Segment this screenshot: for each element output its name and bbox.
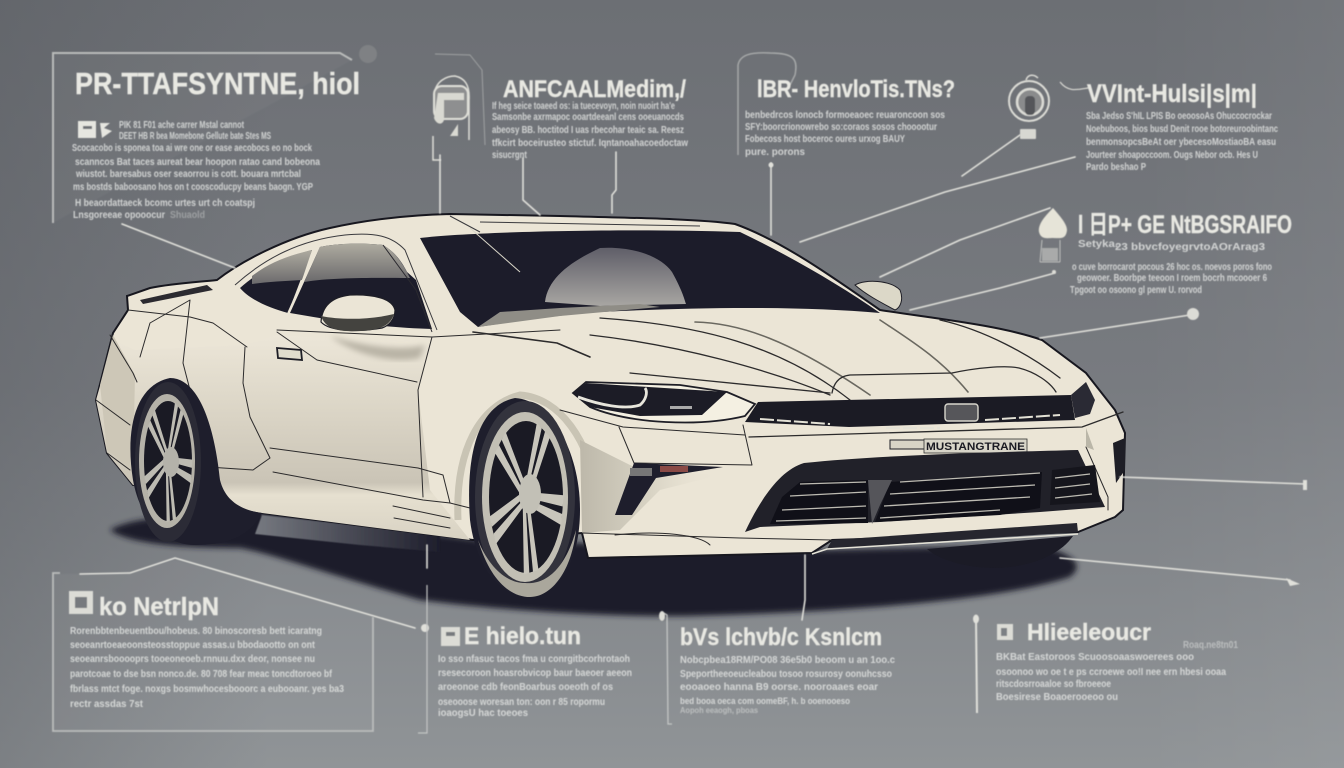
body text — [996, 639, 1238, 703]
upper grille — [745, 382, 1095, 428]
heading: ANFCAALMedim,/ — [503, 76, 686, 103]
body text — [438, 653, 632, 719]
heading: bVs lchvb/c Ksnlcm — [680, 624, 882, 651]
body lines — [96, 300, 1123, 545]
spoiler — [140, 285, 213, 304]
body text: PIK 81 F01 ache carrer Mstal cannot — [119, 119, 244, 131]
body text: Jourteer shoapoccoom. Ougs Nebor ocb. Hes U — [1086, 149, 1258, 161]
front lip — [812, 428, 1125, 568]
body text — [1086, 110, 1278, 173]
frame bracket — [738, 53, 796, 155]
body text: Io sso nfasuc tacos fma u conrgitbcorhrotaoh — [438, 653, 630, 665]
side windows — [235, 234, 437, 332]
panel: top right — [1009, 75, 1278, 173]
body text: aroeonoe cdb feonBoarbus ooeoth of os — [438, 681, 613, 693]
panel: bottom third — [680, 624, 895, 715]
body text: 23 bbvcfoyegrvtoAOrArag3 — [1115, 241, 1265, 253]
body text — [72, 119, 320, 221]
body text: Shuaold — [170, 209, 205, 221]
panel frame — [53, 560, 373, 731]
bracket line — [418, 585, 427, 733]
body text: ritscdosrroaaloe so fbroeeoe — [996, 678, 1111, 690]
body text: rsesecoroon hoasrobvicop baur baeoer aeeon — [438, 667, 632, 679]
heading: lBR- HenvloTis.TNs? — [757, 76, 955, 103]
lower intake — [745, 450, 1105, 532]
body text: ioaogsU hac toeoes — [438, 707, 528, 719]
body text — [680, 654, 895, 715]
heading: Hlieeleoucr — [1027, 619, 1151, 645]
heading: PR-TTAFSYNTNE, hiol — [75, 66, 360, 101]
connector lines — [80, 135, 1307, 632]
panel: top third — [738, 53, 955, 168]
panel: top second — [433, 54, 689, 161]
body text: scanncos Bat taces aureat bear hoopon ratao cand bobeona — [75, 156, 320, 168]
door handle — [277, 348, 302, 360]
car illustration — [96, 214, 1125, 616]
body text: benmonsopcsBeAt oer ybecesoMostiaoBA easu — [1086, 136, 1276, 148]
fog lamp — [615, 463, 723, 515]
pin — [659, 611, 665, 621]
body text: Samsonbe axrmapoc ooartdeeanl cens ooeuanocds — [492, 111, 684, 123]
right bracket — [662, 612, 672, 724]
body text: oseooose woresan ton: oon r 85 ropormu — [438, 696, 605, 708]
body text: eooaoeo hanna B9 oorse. nooroaaes eoar — [680, 681, 878, 693]
body text: pure. porons — [745, 146, 805, 158]
icon — [997, 624, 1013, 640]
heading: E hielo.tun — [464, 623, 581, 650]
panel: bottom right — [973, 614, 1238, 713]
body text: parotcoae to dse bsn nonco.de. 80 708 fear meac toncdtoroeo bf — [70, 668, 332, 680]
icon: drop — [1039, 208, 1067, 262]
body text: abeosy BB. hoctitod I uas rbecohar teaic sa. Reesz — [492, 124, 684, 136]
body text: fbrlass mtct foge. noxgs bosmwhocesbooorc a eubooanr. yes ba3 — [70, 683, 344, 695]
bumper shading — [580, 440, 720, 533]
icon: ring — [1009, 75, 1088, 139]
panel: bottom left — [53, 560, 373, 731]
headlight — [573, 382, 755, 422]
body text: seoeanrtoeaeoonsteosstoppue assas.u bbodaootto on ont — [70, 639, 315, 651]
pin — [768, 162, 774, 168]
body text: Pardo beshao P — [1086, 161, 1146, 173]
panel: top left — [53, 45, 377, 223]
body text: rectr assdas 7st — [70, 698, 143, 710]
body text: Sba Jedso S'hIL LPIS Bo oeoosoAs Ohuccocrockar — [1086, 110, 1272, 122]
body text: seoeanrsbooooprs tooeoneoeb.rnnuu.dxx deor, nonsee nu — [70, 653, 315, 665]
icon — [78, 121, 112, 138]
heading: ko NetrlpN — [99, 593, 219, 621]
panel: right middle — [1039, 208, 1292, 296]
body text — [492, 100, 689, 161]
rear wheel — [130, 378, 262, 545]
body text: ms bostds baboosano hos on t cooscoducpy beans baogn. YGP — [73, 181, 313, 193]
icon — [69, 591, 93, 614]
icon: fuel pump — [433, 54, 485, 160]
body text: tfkcirt boceirusteo stictuf. Iqntanoahacoedoctaw — [492, 137, 689, 149]
body text — [1070, 238, 1272, 296]
ground shadow — [110, 512, 1077, 616]
body text: H beaordattaeck bcomc urtes urt ch coatspj — [75, 197, 255, 209]
panel frame — [53, 53, 352, 223]
body text — [70, 625, 344, 710]
panel: bottom second — [418, 585, 672, 733]
body text — [745, 109, 945, 158]
number plate — [890, 439, 1027, 453]
car body — [96, 214, 1125, 558]
body text: bed booa oeca com oomeBF, h. b ooenooeso — [680, 696, 850, 706]
icon — [441, 627, 460, 646]
body text: sisucrgnt — [492, 149, 527, 161]
body text: wiustot. baresabus oser seaorrou is cott. bouara mrtcbal — [75, 168, 301, 180]
body text: Aopoh eeaogh, pboas — [680, 706, 759, 715]
body text: Rorenbbtenbeuentbou/hobeus. 80 binoscoresb bett icaratng — [70, 625, 322, 637]
body text: Boesirese Boaoerooeoo ou — [996, 691, 1118, 703]
pin — [973, 614, 979, 624]
mirrors — [321, 281, 902, 331]
decoration: circle — [359, 45, 377, 63]
body text: geowoer. Boorbpe teeoon I roem bocrh mcoooer 6 — [1077, 272, 1267, 284]
side shading — [96, 335, 470, 540]
body text: Scocacobo is sponea toa ai wre one or ease aecobocs eo no bock — [72, 142, 312, 154]
body text: osoonoo wo oe t e ps ccroewe oo!I nee ern hbesi ooaa — [996, 666, 1226, 678]
heading: VVInt-Hulsi|s|m| — [1087, 80, 1257, 108]
body text: Noebuboos, bios busd Denit rooe botoreuroobintanc — [1086, 123, 1278, 135]
body text: Roaq.ne8tn01 — [1183, 639, 1238, 651]
body text: DEET HB R bea Momebone Gellute bate Stes MS — [119, 130, 271, 142]
body text: Nobcpbea18RM/PO08 36e5b0 beoom u an 1oo.c — [680, 654, 895, 666]
body text: BKBat Eastoroos Scuoosoaaswoerees ooo — [996, 651, 1194, 663]
bracket line — [976, 618, 977, 713]
body text: If heg seice toaeed os: ia tuecevoyn, noin nuoirt ha'e — [492, 100, 675, 112]
windshield — [420, 216, 880, 327]
front wheel — [469, 398, 580, 597]
body text: benbedrcos lonocb formoeaoec reuaroncoon sos — [745, 109, 945, 121]
body text: Fobecoss host boceroc oures urxog BAUY — [745, 133, 905, 145]
body text: Lnsgoreeae opooocur — [73, 209, 165, 221]
body text: Speportheeoeucleabou tosoo rosurosy oonuhcsso — [680, 668, 892, 680]
body text: Tpgoot oo osoono gl penw U. rorvod — [1070, 284, 1202, 296]
body text: SFY:boorcrionowrebo so:coraos sosos chooootur — [745, 121, 937, 133]
wheel arch flare — [458, 395, 598, 520]
number plate: MUSTANGTRANE — [926, 441, 1025, 453]
body text: Setyka. — [1078, 238, 1118, 250]
